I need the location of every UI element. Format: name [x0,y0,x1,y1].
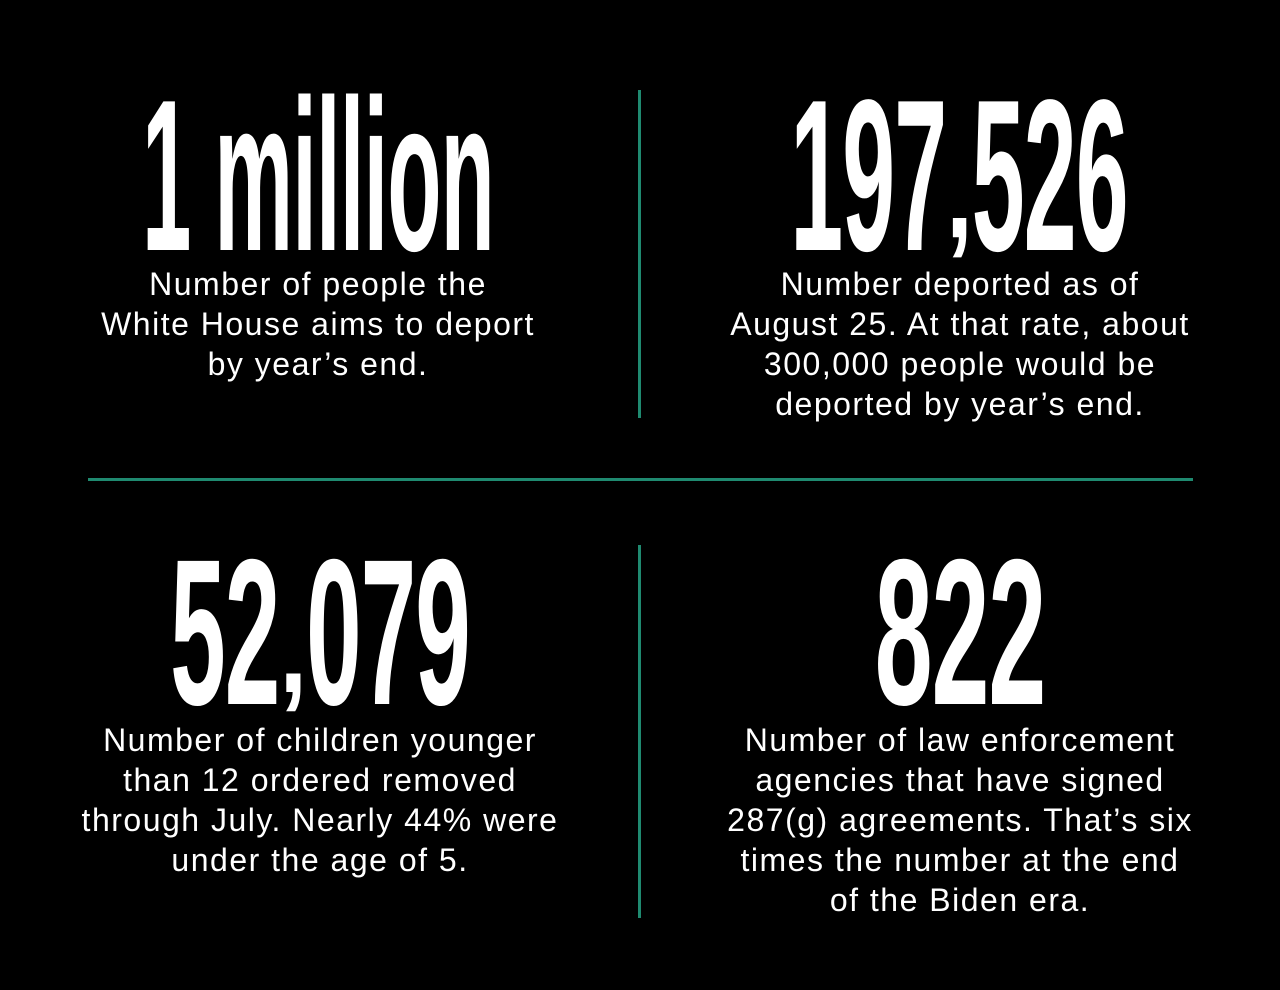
text: 822 description: of the Biden era. [830,882,1090,918]
text: 197,526 description [730,266,1190,422]
text: 1 million description: Number of people the [149,266,487,302]
text: 197,526 description: August 25. At that rate, about [730,306,1190,342]
text: 197,526 description: 300,000 people would be [764,346,1156,382]
text: 822 description: agencies that have signed [755,762,1165,798]
stat: 1 million: 1 million [142,54,494,296]
text: 822 description: 287(g) agreements. That’s six [727,802,1193,838]
text: 52,079 description: than 12 ordered removed [123,762,517,798]
text: 52,079 description [82,722,558,878]
stat: 52,079: , [279,580,306,719]
text: 52,079 description: through July. Nearly 44% were [82,802,558,838]
stat: 822: 822 [875,517,1045,749]
text: 197,526 description: Number deported as of [781,266,1139,302]
stat: 197,526: , [946,120,972,265]
text: 822 description: Number of law enforcement [745,722,1175,758]
text: 822 description: times the number at the end [741,842,1179,878]
text: 1 million description: by year’s end. [208,346,428,382]
text: 52,079 description: under the age of 5. [171,842,469,878]
text: 52,079 description: Number of children younger [103,722,537,758]
stat: 52,079: 52079 [170,517,470,749]
text: 822 description [727,722,1193,918]
text: 1 million description: White House aims to deport [101,306,535,342]
text: 197,526 description: deported by year’s end. [775,386,1145,422]
text: 1 million description [101,266,535,382]
stat: 197,526: 197526 [790,54,1128,296]
